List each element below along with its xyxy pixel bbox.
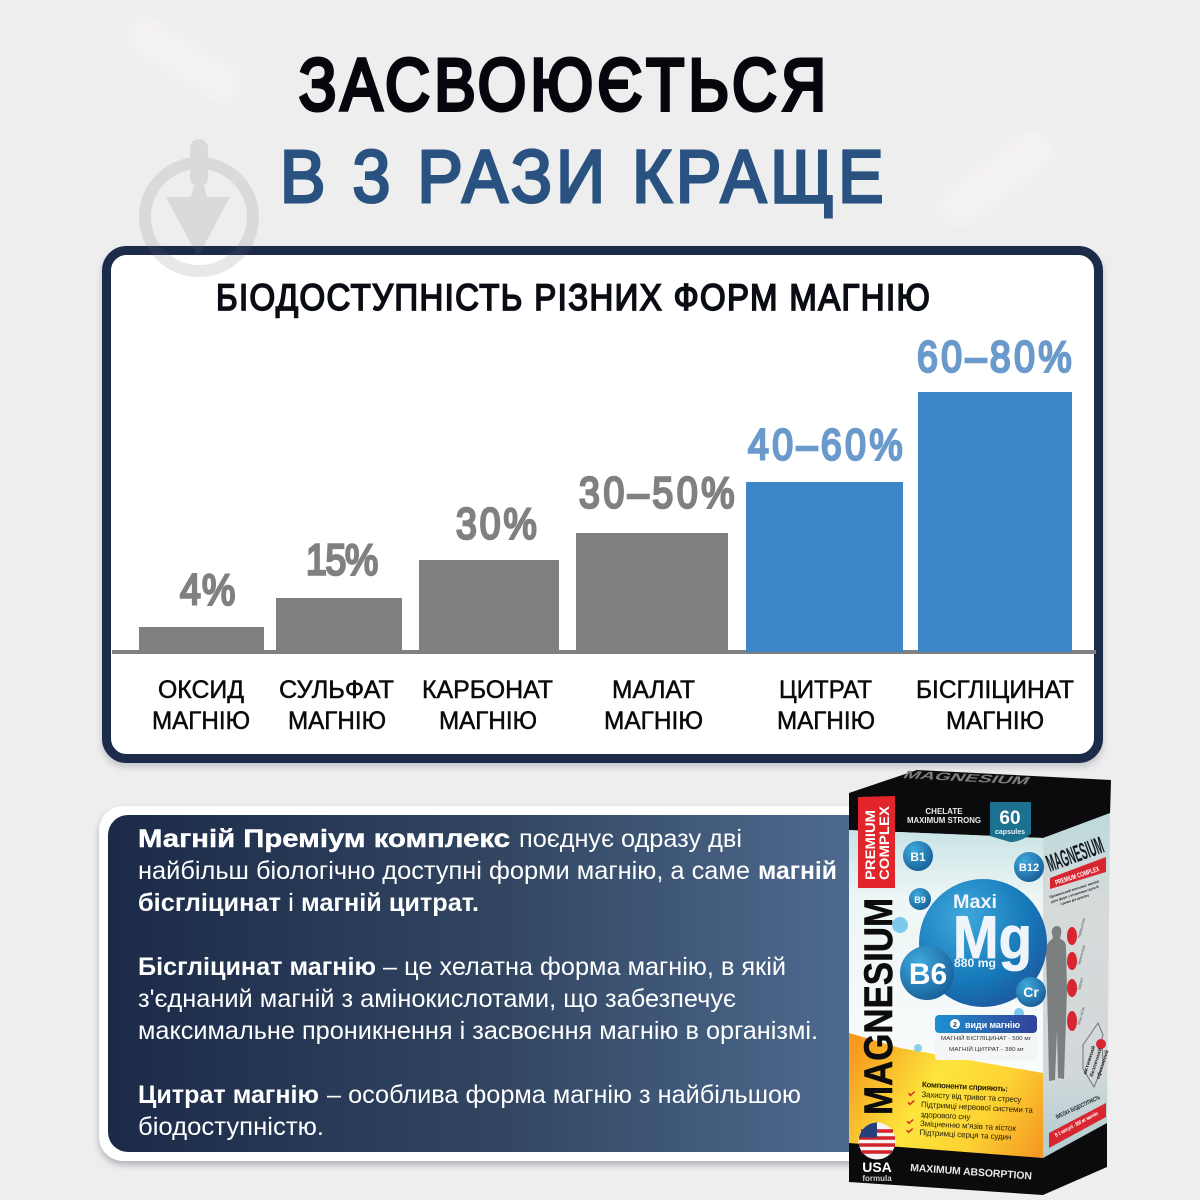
badge: 60 capsules: 60 (999, 808, 1021, 829)
bar values: 30–50% (579, 468, 735, 517)
panel: description (99, 806, 898, 1161)
label: chelate: CHELATE (925, 807, 963, 816)
bar values: 15% (306, 535, 378, 584)
label: magnesium kinds: МАГНІЙ БІСГЛІЦИНАТ - 500 мг (941, 1034, 1031, 1042)
paragraph: complex: магній (758, 857, 837, 885)
paragraph: complex: бісгліцинат (138, 889, 281, 917)
box front bottom band (849, 1123, 1107, 1195)
bar labels: МАГНІЮ (946, 707, 1044, 735)
icon: vitamin spheres: B9 (914, 895, 926, 905)
product box (849, 768, 1111, 1195)
text: components list: здорового сну (920, 1110, 971, 1122)
bar labels: МАГНІЮ (439, 707, 537, 735)
icon: vitamin spheres: B1 (910, 850, 926, 864)
paragraph: complex (138, 825, 837, 917)
box right side: Зміцнення серця (1076, 945, 1086, 965)
panel: bioavailability chart (106, 250, 1098, 758)
icon: big magnesium sphere (919, 879, 1047, 1007)
text: components list: Захисту від тривог та стресу (921, 1090, 1022, 1104)
text: components list: Зміцненню м'язів та кісток (920, 1119, 1017, 1133)
label: maximum absorption: MAXIMUM ABSORPTION (910, 1162, 1032, 1183)
box right side: активний (1081, 1045, 1097, 1076)
label: usa formula: formula (862, 1174, 892, 1183)
label: usa formula (862, 1159, 892, 1183)
icon: big magnesium sphere: 880 mg (954, 956, 996, 970)
label: usa formula: USA (862, 1159, 892, 1175)
box front (849, 830, 1043, 1158)
badge: 60 capsules: capsules (995, 829, 1025, 836)
text: components list (906, 1079, 1035, 1143)
box right side: Преміальний комплекс магнію (1049, 879, 1100, 899)
paragraph: bisglycinate: Бісгліцинат магнію (138, 953, 376, 981)
decorative capsule top left (145, 36, 224, 84)
paragraph: complex: поєднує одразу дві (519, 825, 742, 853)
paragraph: bisglycinate: – це хелатна форма магнію, в якій (383, 953, 786, 981)
icon: vitamin spheres: B6 (909, 958, 947, 991)
bar labels: СУЛЬФАТ (279, 676, 394, 704)
bar labels: МАГНІЮ (152, 707, 250, 735)
label: chelate: MAXIMUM STRONG (907, 816, 981, 825)
icon: big magnesium sphere: Mg (953, 904, 1032, 971)
text: components list: Підтримці нервової системи та (921, 1100, 1034, 1115)
paragraph: citrate: – особлива форма магнію з найбільшою (327, 1081, 801, 1109)
box right side: Здоров'я (1076, 977, 1084, 990)
box right side: і хромом для організму (1060, 893, 1089, 906)
icon: vitamin spheres: B12 (1019, 862, 1039, 874)
icon: watermark (139, 139, 259, 277)
box right side: В 1 капсулі - 880 мг магнію (1054, 1111, 1099, 1139)
red premium block: PREMIUM (863, 810, 878, 880)
paragraph: bisglycinate: максимальне проникнення і засвоєння магнію в організмі. (138, 1017, 818, 1045)
label: magnesium kinds: МАГНІЙ ЦИТРАТ - 380 мг (949, 1045, 1024, 1053)
label: magnesium kinds (935, 1015, 1037, 1060)
paragraph: complex: Магній Преміум комплекс (138, 825, 510, 853)
decorative capsule top right (960, 152, 1032, 206)
vertical brand name: MAGNESIUM (857, 898, 901, 1115)
paragraph: complex: і (288, 889, 294, 917)
lower panel shadow (99, 810, 889, 1165)
red premium block: COMPLEX (877, 806, 892, 880)
text: MAGNESIUM (1043, 832, 1107, 878)
icon: usa flag (858, 1122, 896, 1160)
chart heading: БІОДОСТУПНІСТЬ РІЗНИХ ФОРМ МАГНІЮ (216, 277, 930, 318)
paragraph: bisglycinate (138, 953, 818, 1045)
bar labels: БІСГЛІЦИНАТ (916, 676, 1074, 704)
bar labels: МАГНІЮ (777, 707, 875, 735)
badge: 60 capsules (990, 802, 1031, 842)
label: chelate (907, 807, 981, 825)
icon: big magnesium sphere: Maxi (953, 892, 997, 913)
box right side: ВИСОКА БІОДОСТУПНІСТЬ (1055, 1095, 1102, 1121)
box top and black band (849, 770, 1111, 838)
paragraph: citrate: біодоступністю. (138, 1113, 324, 1141)
box right side: Нервова система (1076, 917, 1086, 938)
title: В 3 РАЗИ КРАЩЕ (280, 136, 884, 219)
box top lettering: MAGNESIUM (900, 768, 1033, 787)
bar labels: МАГНІЮ (604, 707, 703, 735)
bar values (180, 332, 1072, 614)
bar values: 60–80% (917, 332, 1072, 381)
bar values: 30% (456, 499, 537, 548)
paragraph: citrate: Цитрат магнію (138, 1081, 319, 1109)
bar labels: МАЛАТ (612, 676, 695, 704)
box right side: PREMIUM COMPLEX (1054, 866, 1101, 887)
bar labels: МАГНІЮ (288, 707, 386, 735)
box right side: ефективний (1095, 1049, 1110, 1080)
box front orange area (849, 1033, 1043, 1158)
text: components list: Підтримці серця та судин (919, 1128, 1012, 1142)
paragraph: complex: найбільш біологічно доступні форми магнію, а саме (138, 857, 750, 885)
bar chart (112, 392, 1096, 654)
box right side (1043, 813, 1110, 1158)
paragraph: citrate (138, 1081, 801, 1141)
bar values: 4% (180, 565, 235, 614)
label: magnesium kinds: види магнію (965, 1020, 1020, 1030)
paragraph: complex: магній цитрат. (301, 889, 479, 917)
box right side: безпечний (1088, 1047, 1104, 1078)
icon: vitamin spheres (892, 841, 1046, 1052)
panel shadow (102, 250, 1103, 767)
bar labels (152, 676, 1074, 735)
bar values: 40–60% (748, 420, 903, 469)
bar labels: ОКСИД (158, 676, 244, 704)
bar labels: ЦИТРАТ (779, 676, 872, 704)
bar labels: КАРБОНАТ (422, 676, 553, 704)
label: magnesium kinds: 2 (953, 1022, 957, 1029)
paragraph: bisglycinate: з'єднаний магній з амінокислотами, що забезпечує (138, 985, 736, 1013)
icon: vitamin spheres: Cr (1023, 984, 1039, 1000)
title: ЗАСВОЮЄТЬСЯ (299, 45, 826, 126)
title (280, 45, 884, 219)
box right side: двох форм з вітамінами групи В (1050, 885, 1100, 904)
box right side: М'язи і кістки (1076, 1007, 1086, 1025)
text: components list: Компоненти сприяють: (922, 1080, 1008, 1093)
red premium block (858, 796, 895, 888)
